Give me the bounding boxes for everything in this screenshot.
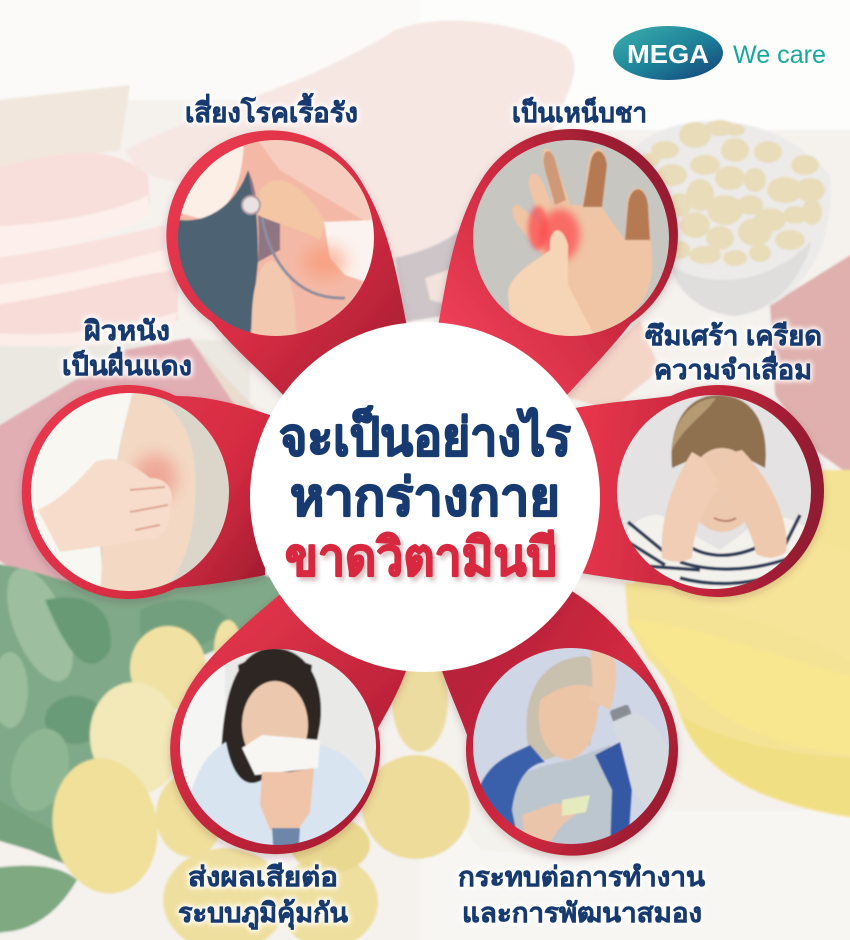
label: depression, stress, memory loss: ความจำเสื่อม — [654, 350, 812, 385]
bananas — [620, 470, 850, 820]
title line 3 highlighted: ขาดวิตามินบี — [288, 533, 560, 591]
panel: right depression and stress — [575, 385, 824, 600]
centre white circle with title — [250, 322, 600, 672]
label: numbness: เป็นเหน็บชา — [512, 95, 647, 128]
label: work and brain development: และการพัฒนาสมอง — [462, 898, 702, 928]
photo: hands with red glow — [473, 140, 669, 336]
photo: woman sneezing in tissue — [180, 649, 376, 845]
label: immune system: ระบบภูมิคุ้มกัน — [178, 898, 349, 930]
label: skin rash: เป็นผื่นแดง — [62, 346, 192, 381]
label: depression, stress, memory loss: ซึมเศร้า เครียด — [645, 321, 822, 351]
red pin shape — [437, 129, 678, 397]
photo: woman holding her head — [617, 395, 811, 589]
label: numbness: เป็นเหน็บชา — [512, 95, 647, 128]
label: depression, stress, memory loss — [645, 321, 822, 385]
pistachio bowl — [632, 120, 831, 316]
logo: MEGA We care — [613, 26, 826, 80]
potatoes — [42, 620, 470, 940]
photo: doctor with stethoscope — [178, 140, 374, 336]
panel: bottom-left immune system — [170, 590, 408, 860]
panel: top-right numbness — [437, 129, 678, 397]
title line 2: หากร่างกาย — [290, 469, 560, 527]
label: depression, stress, memory loss: ซึมเศร้า เครียด — [645, 321, 822, 351]
red pin shape — [22, 385, 270, 599]
label: work and brain development: กระทบต่อการทำงาน — [458, 862, 706, 892]
chicken — [125, 21, 575, 262]
red pin shape — [166, 130, 408, 397]
label: chronic disease risk: เสี่ยงโรคเรื้อรัง — [185, 92, 358, 128]
logo tagline: We care — [733, 41, 826, 69]
label: immune system: ระบบภูมิคุ้มกัน — [178, 898, 349, 930]
logo wordmark: MEGA — [627, 39, 709, 69]
label: depression, stress, memory loss: ความจำเสื่อม — [654, 350, 812, 385]
hair — [672, 395, 766, 468]
red pin shape — [575, 385, 824, 597]
panel: bottom-right work and brain development — [440, 590, 678, 856]
label: immune system: ส่งผลเสียต่อ — [188, 862, 338, 892]
panel: top-left risk of chronic disease — [166, 130, 408, 397]
red meat right — [770, 243, 850, 490]
title line 1: จะเป็นอย่างไร — [279, 406, 571, 467]
spinach — [0, 562, 280, 860]
label: skin rash: ผิวหนัง — [84, 316, 170, 346]
panel: left skin rash — [22, 385, 270, 600]
label: work and brain development — [458, 862, 706, 928]
red pin shape — [440, 590, 678, 856]
photo: arm being scratched — [31, 393, 229, 591]
red meat left — [0, 338, 265, 620]
label: immune system: ส่งผลเสียต่อ — [188, 862, 338, 892]
label: work and brain development: กระทบต่อการทำงาน — [458, 862, 706, 892]
label: skin rash: เป็นผื่นแดง — [62, 346, 192, 381]
pork slices — [0, 153, 178, 347]
red pin shape — [170, 590, 408, 854]
photo: older woman with note — [473, 648, 669, 844]
label: immune system — [178, 862, 349, 930]
bowl base white — [440, 610, 680, 860]
label: skin rash — [62, 316, 192, 381]
label: chronic disease risk: เสี่ยงโรคเรื้อรัง — [185, 92, 358, 128]
logo oval — [613, 26, 723, 80]
title line 3 highlighted: ขาดวิตามินบี — [285, 529, 557, 587]
label: skin rash: ผิวหนัง — [84, 316, 170, 346]
label: work and brain development: และการพัฒนาสมอง — [462, 898, 702, 928]
